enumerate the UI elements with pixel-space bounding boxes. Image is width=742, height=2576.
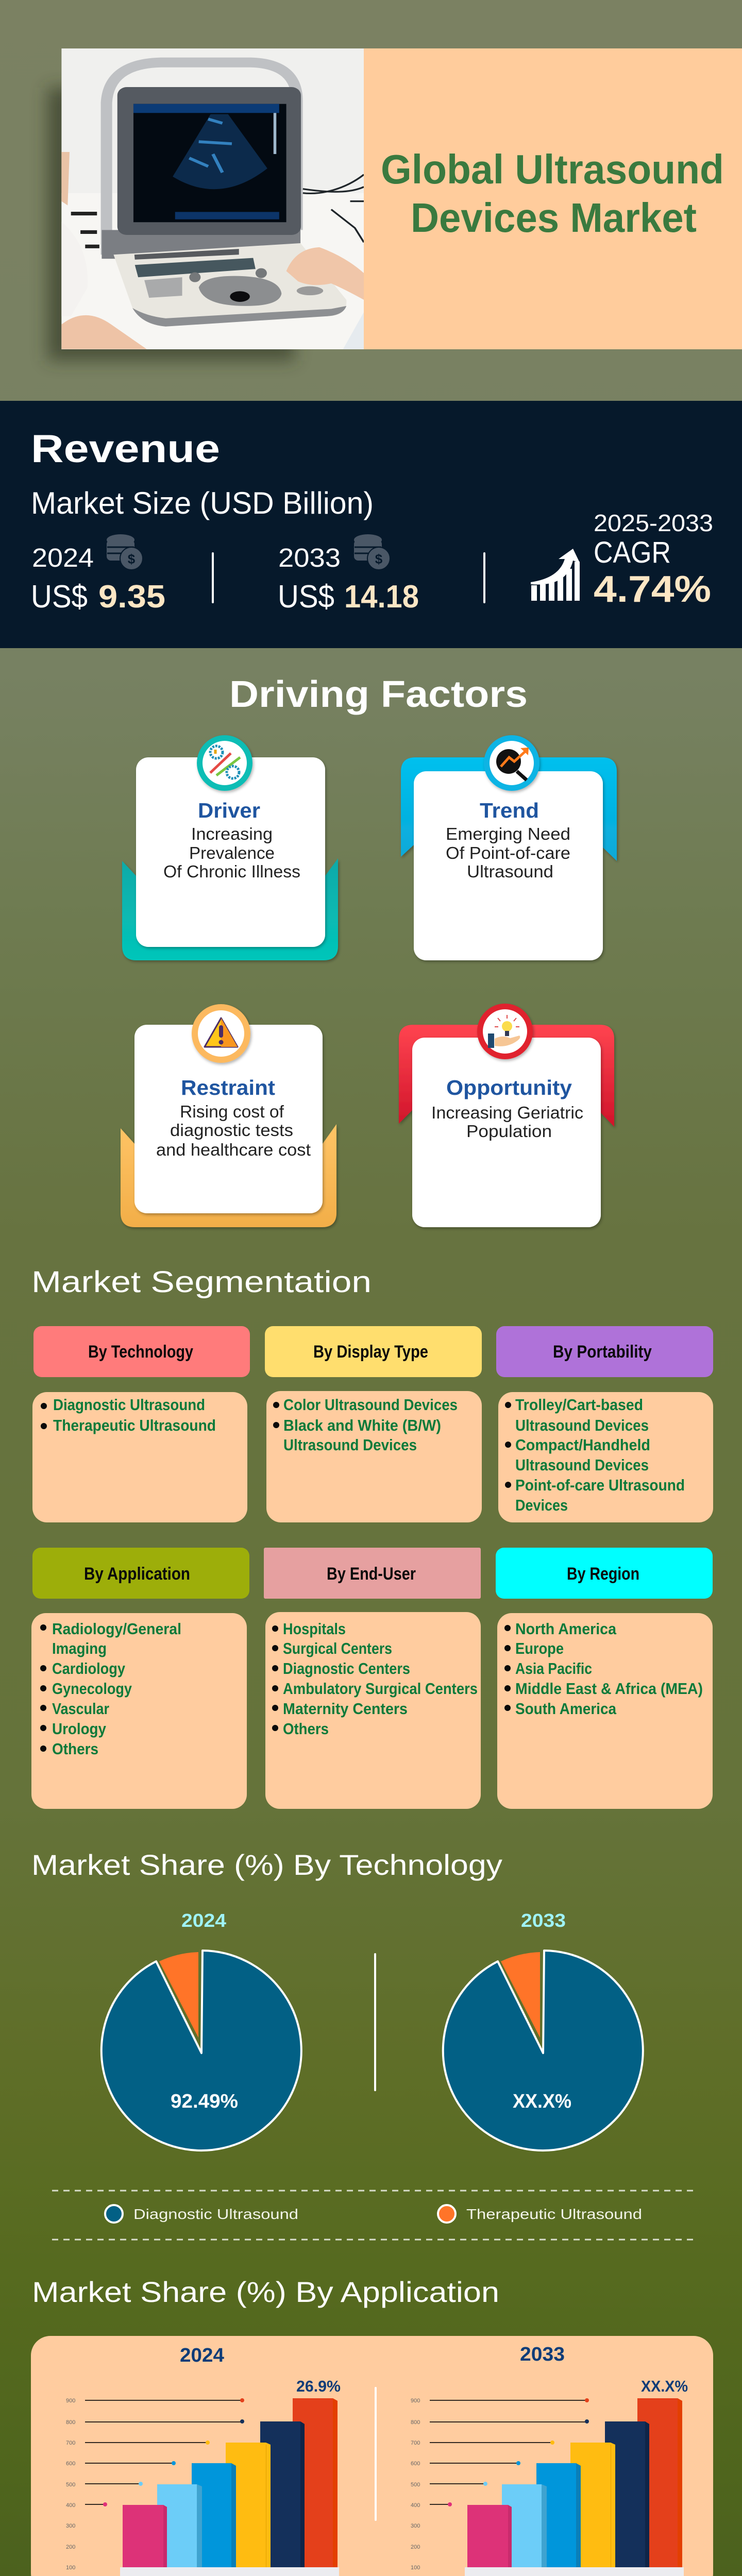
card: restraint: Rising cost of xyxy=(180,1102,284,1121)
divider xyxy=(375,2387,377,2521)
2024 value: US$ xyxy=(31,579,88,615)
icon: growth arrow xyxy=(531,549,580,601)
divider xyxy=(212,552,214,603)
segment: by application: Vascular xyxy=(52,1700,109,1718)
segment: by region: By Region xyxy=(567,1564,639,1584)
segment: by display type xyxy=(265,1326,482,1522)
2033 value xyxy=(278,579,419,615)
card: driver xyxy=(122,735,338,960)
title xyxy=(381,146,724,241)
segment: by portability: Ultrasound Devices xyxy=(515,1416,649,1434)
segment: by region: North America xyxy=(515,1620,617,1638)
photo shadow xyxy=(47,88,295,361)
pie chart 2033 xyxy=(443,1951,643,2150)
segment: by application: Cardiology xyxy=(52,1659,126,1677)
legend: technology: Diagnostic Ultrasound xyxy=(133,2206,298,2222)
segment: by technology xyxy=(32,1326,250,1522)
bar chart 2024: 200 xyxy=(66,2544,75,2550)
bar chart 2033: 600 xyxy=(411,2461,420,2467)
pie chart 2024 xyxy=(102,1951,301,2150)
year 2033: 2033 xyxy=(520,2344,565,2365)
bar chart 2033: 900 xyxy=(411,2398,420,2404)
segment: by application: Urology xyxy=(52,1720,107,1738)
segment: by region: Middle East & Africa (MEA) xyxy=(515,1680,703,1698)
card: restraint: and healthcare cost xyxy=(156,1140,311,1159)
segment: by application: Imaging xyxy=(52,1639,107,1657)
segment: by display type: Ultrasound Devices xyxy=(283,1436,417,1454)
card: trend: Of Point-of-care xyxy=(446,843,570,862)
title background xyxy=(364,48,742,349)
CAGR period: 2025-2033 xyxy=(594,510,713,536)
icon: coins 2033 xyxy=(354,534,390,570)
segment: by region: Asia Pacific xyxy=(515,1659,592,1677)
2024 year: 2024 xyxy=(32,543,94,572)
icon: warning triangle xyxy=(205,1018,238,1047)
segment: by region xyxy=(496,1548,713,1809)
segment: by end-user xyxy=(264,1548,481,1809)
icon: coins 2024: $ xyxy=(128,551,136,567)
title: Devices Market xyxy=(411,195,697,241)
segment: by portability: By Portability xyxy=(553,1342,652,1362)
heading: Market Share (%) By Technology xyxy=(31,1849,502,1881)
legend: technology: Therapeutic Ultrasound xyxy=(466,2206,642,2222)
card: restraint xyxy=(121,1004,336,1227)
heading: Market Share (%) By Application xyxy=(32,2276,499,2308)
bar chart 2024: 600 xyxy=(66,2461,75,2467)
card: restraint: diagnostic tests xyxy=(170,1121,293,1140)
card: trend xyxy=(401,735,617,960)
chart panel xyxy=(31,2336,713,2576)
bar chart 2024: 800 xyxy=(66,2419,75,2426)
card: opportunity: Increasing Geriatric xyxy=(431,1103,583,1122)
card: opportunity: Population xyxy=(466,1122,552,1141)
segment: by portability: Point-of-care Ultrasound xyxy=(515,1476,685,1494)
segment: by technology: Diagnostic Ultrasound xyxy=(53,1396,205,1414)
bar chart 2024 xyxy=(66,2377,341,2576)
bar chart 2024: 700 xyxy=(66,2440,75,2446)
year 2033: 2033 xyxy=(521,1910,566,1931)
title: Global Ultrasound xyxy=(381,146,724,192)
bar chart 2033: XX.X% xyxy=(641,2377,688,2395)
card: driver: Driver xyxy=(198,799,260,822)
card: trend: Ultrasound xyxy=(467,862,553,881)
revenue heading: Revenue xyxy=(31,427,220,471)
card: opportunity xyxy=(399,1004,614,1227)
card: driver: Prevalence xyxy=(189,843,275,862)
bar chart 2033: 200 xyxy=(411,2544,420,2550)
segment: by display type: Color Ultrasound Devices xyxy=(283,1396,458,1414)
bar chart 2033: 800 xyxy=(411,2419,420,2426)
card: restraint: Restraint xyxy=(181,1076,275,1099)
segment: by application xyxy=(31,1548,249,1809)
bar chart 2033: 500 xyxy=(411,2482,420,2488)
2033 value: 14.18 xyxy=(344,579,419,615)
photo: ultrasound machine xyxy=(61,48,364,351)
segment: by display type: By Display Type xyxy=(313,1342,428,1362)
segment: by technology: By Technology xyxy=(88,1342,193,1362)
panel: market share by application xyxy=(31,2276,713,2576)
heading: Driving Factors xyxy=(229,674,528,715)
bar chart 2024: 100 xyxy=(66,2565,75,2571)
icon: trend xyxy=(496,748,529,780)
segment: by application: Gynecology xyxy=(52,1680,132,1698)
segment: by region: Europe xyxy=(515,1639,564,1657)
CAGR label: CAGR xyxy=(594,536,671,569)
segment: by application: Radiology/General xyxy=(52,1620,181,1638)
segment: by end-user: Surgical Centers xyxy=(283,1639,392,1657)
bar chart 2033: 400 xyxy=(411,2502,420,2509)
panel: driving factors xyxy=(121,674,617,1227)
2024 value xyxy=(31,579,165,615)
segment: by application: By Application xyxy=(84,1564,190,1584)
segment: by end-user: Diagnostic Centers xyxy=(283,1659,410,1677)
segment: by end-user: Maternity Centers xyxy=(283,1700,408,1718)
icon: hand with bulb xyxy=(488,1015,520,1048)
panel: market share by technology xyxy=(31,1849,695,2240)
pie chart 2024: 92.49% xyxy=(171,2091,238,2112)
segment: by end-user: Hospitals xyxy=(283,1620,346,1638)
bar chart 2024: 300 xyxy=(66,2523,75,2529)
market size label: Market Size (USD Billion) xyxy=(31,486,374,520)
legend: technology xyxy=(105,2205,642,2223)
revenue background xyxy=(0,401,742,648)
icon: coins 2033: $ xyxy=(375,551,383,567)
segment: by portability: Devices xyxy=(515,1496,568,1514)
2024 value: 9.35 xyxy=(98,579,165,615)
segment: by end-user: Others xyxy=(283,1720,329,1738)
heading: Market Segmentation xyxy=(31,1265,372,1299)
icon: driver xyxy=(210,746,240,778)
bar chart 2033 xyxy=(411,2377,688,2576)
card: driver: Increasing xyxy=(191,824,273,843)
segment: by portability: Trolley/Cart-based xyxy=(515,1396,643,1414)
segment: by region: South America xyxy=(515,1700,617,1718)
2033 value: US$ xyxy=(278,579,334,615)
icon: coins 2024 xyxy=(107,534,143,570)
segment: by technology: Therapeutic Ultrasound xyxy=(53,1416,216,1434)
segment: by portability: Compact/Handheld xyxy=(515,1436,650,1454)
card: trend: Emerging Need xyxy=(446,824,570,843)
segment: by portability: Ultrasound Devices xyxy=(515,1456,649,1474)
card: driver: Of Chronic Illness xyxy=(163,862,300,881)
segment: by end-user: By End-User xyxy=(327,1564,416,1584)
year 2024: 2024 xyxy=(181,1910,226,1931)
segment: by portability xyxy=(496,1326,713,1522)
divider xyxy=(374,1953,376,2091)
panel: hero xyxy=(47,48,742,361)
CAGR value: 4.74% xyxy=(594,569,711,610)
divider xyxy=(483,552,485,603)
segment: by end-user: Ambulatory Surgical Centers xyxy=(283,1680,478,1698)
pie chart 2033: XX.X% xyxy=(513,2091,571,2112)
bar chart 2024: 400 xyxy=(66,2502,75,2509)
segment: by application: Others xyxy=(52,1740,98,1758)
bar chart 2033: 700 xyxy=(411,2440,420,2446)
year 2024: 2024 xyxy=(180,2345,224,2366)
2033 year: 2033 xyxy=(278,543,341,572)
card: trend: Trend xyxy=(480,799,539,822)
panel: revenue xyxy=(0,401,742,648)
bar chart 2024: 26.9% xyxy=(296,2377,341,2395)
segment: by display type: Black and White (B/W) xyxy=(283,1416,441,1434)
bar chart 2024: 900 xyxy=(66,2398,75,2404)
card: opportunity: Opportunity xyxy=(446,1076,572,1099)
bar chart 2033: 300 xyxy=(411,2523,420,2529)
bar chart 2033: 100 xyxy=(411,2565,420,2571)
bar chart 2024: 500 xyxy=(66,2482,75,2488)
panel: market segmentation xyxy=(31,1265,713,1809)
